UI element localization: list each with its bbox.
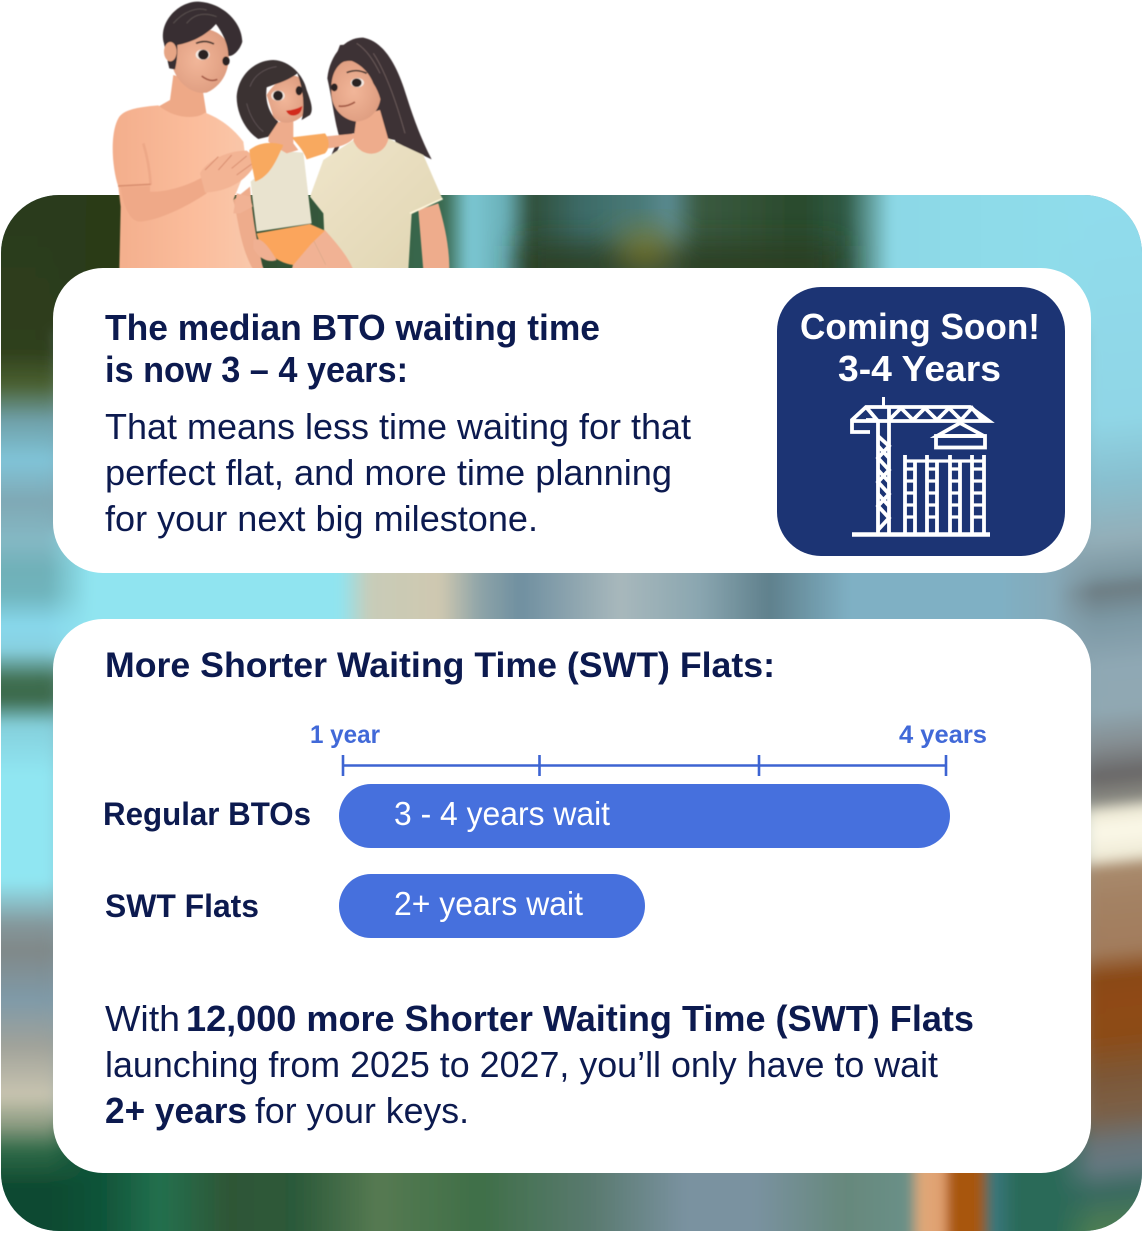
- man: [113, 2, 264, 270]
- badge text: Coming Soon!: [800, 306, 1040, 347]
- timeline chart: [103, 721, 987, 938]
- icon: tower crane and building: [852, 397, 990, 534]
- bar: SWT Flats: 2+ years wait: [394, 885, 583, 922]
- heading: SWT flats: More Shorter Waiting Time (SWT) Flats:: [105, 646, 775, 685]
- bar: Regular BTOs: 3 - 4 years wait: [394, 795, 610, 832]
- body text: less time waiting: perfect flat, and more time planning: [105, 452, 672, 493]
- axis ticks: [343, 755, 946, 776]
- panel: median BTO waiting time: [53, 268, 1091, 573]
- heading: median waiting time: is now 3 – 4 years:: [105, 349, 408, 390]
- text block: 12,000 more SWT flats: for your keys.: [255, 1090, 469, 1131]
- text block: 12,000 more SWT flats: launching from 2025 to 2027, you’ll only have to wait: [105, 1044, 938, 1085]
- text block: 12,000 more SWT flats: 12,000 more Shorter Waiting Time (SWT) Flats: [186, 998, 974, 1039]
- text block: 12,000 more SWT flats: With: [105, 998, 180, 1039]
- body text: less time waiting: for your next big milestone.: [105, 498, 538, 539]
- text block: 12,000 more SWT flats: [105, 998, 974, 1131]
- woman: [310, 38, 449, 270]
- row label: SWT Flats: SWT Flats: [105, 888, 259, 924]
- bar: SWT Flats: [339, 874, 645, 938]
- text block: 12,000 more SWT flats: 2+ years: [105, 1090, 247, 1131]
- bar: Regular BTOs: [339, 784, 950, 848]
- girl: [233, 60, 357, 270]
- family illustration: [113, 2, 449, 270]
- badge text: 3-4 Years: [838, 348, 1001, 389]
- heading: median waiting time: The median BTO waiting time: [105, 307, 600, 348]
- body text: less time waiting: That means less time waiting for that: [105, 406, 691, 447]
- row label: Regular BTOs: Regular BTOs: [103, 796, 311, 832]
- axis labels: 4 years: [899, 721, 987, 749]
- axis labels: 1 year: [310, 721, 380, 749]
- badge: coming soon: [777, 287, 1065, 556]
- panel: shorter waiting time flats: [53, 619, 1091, 1173]
